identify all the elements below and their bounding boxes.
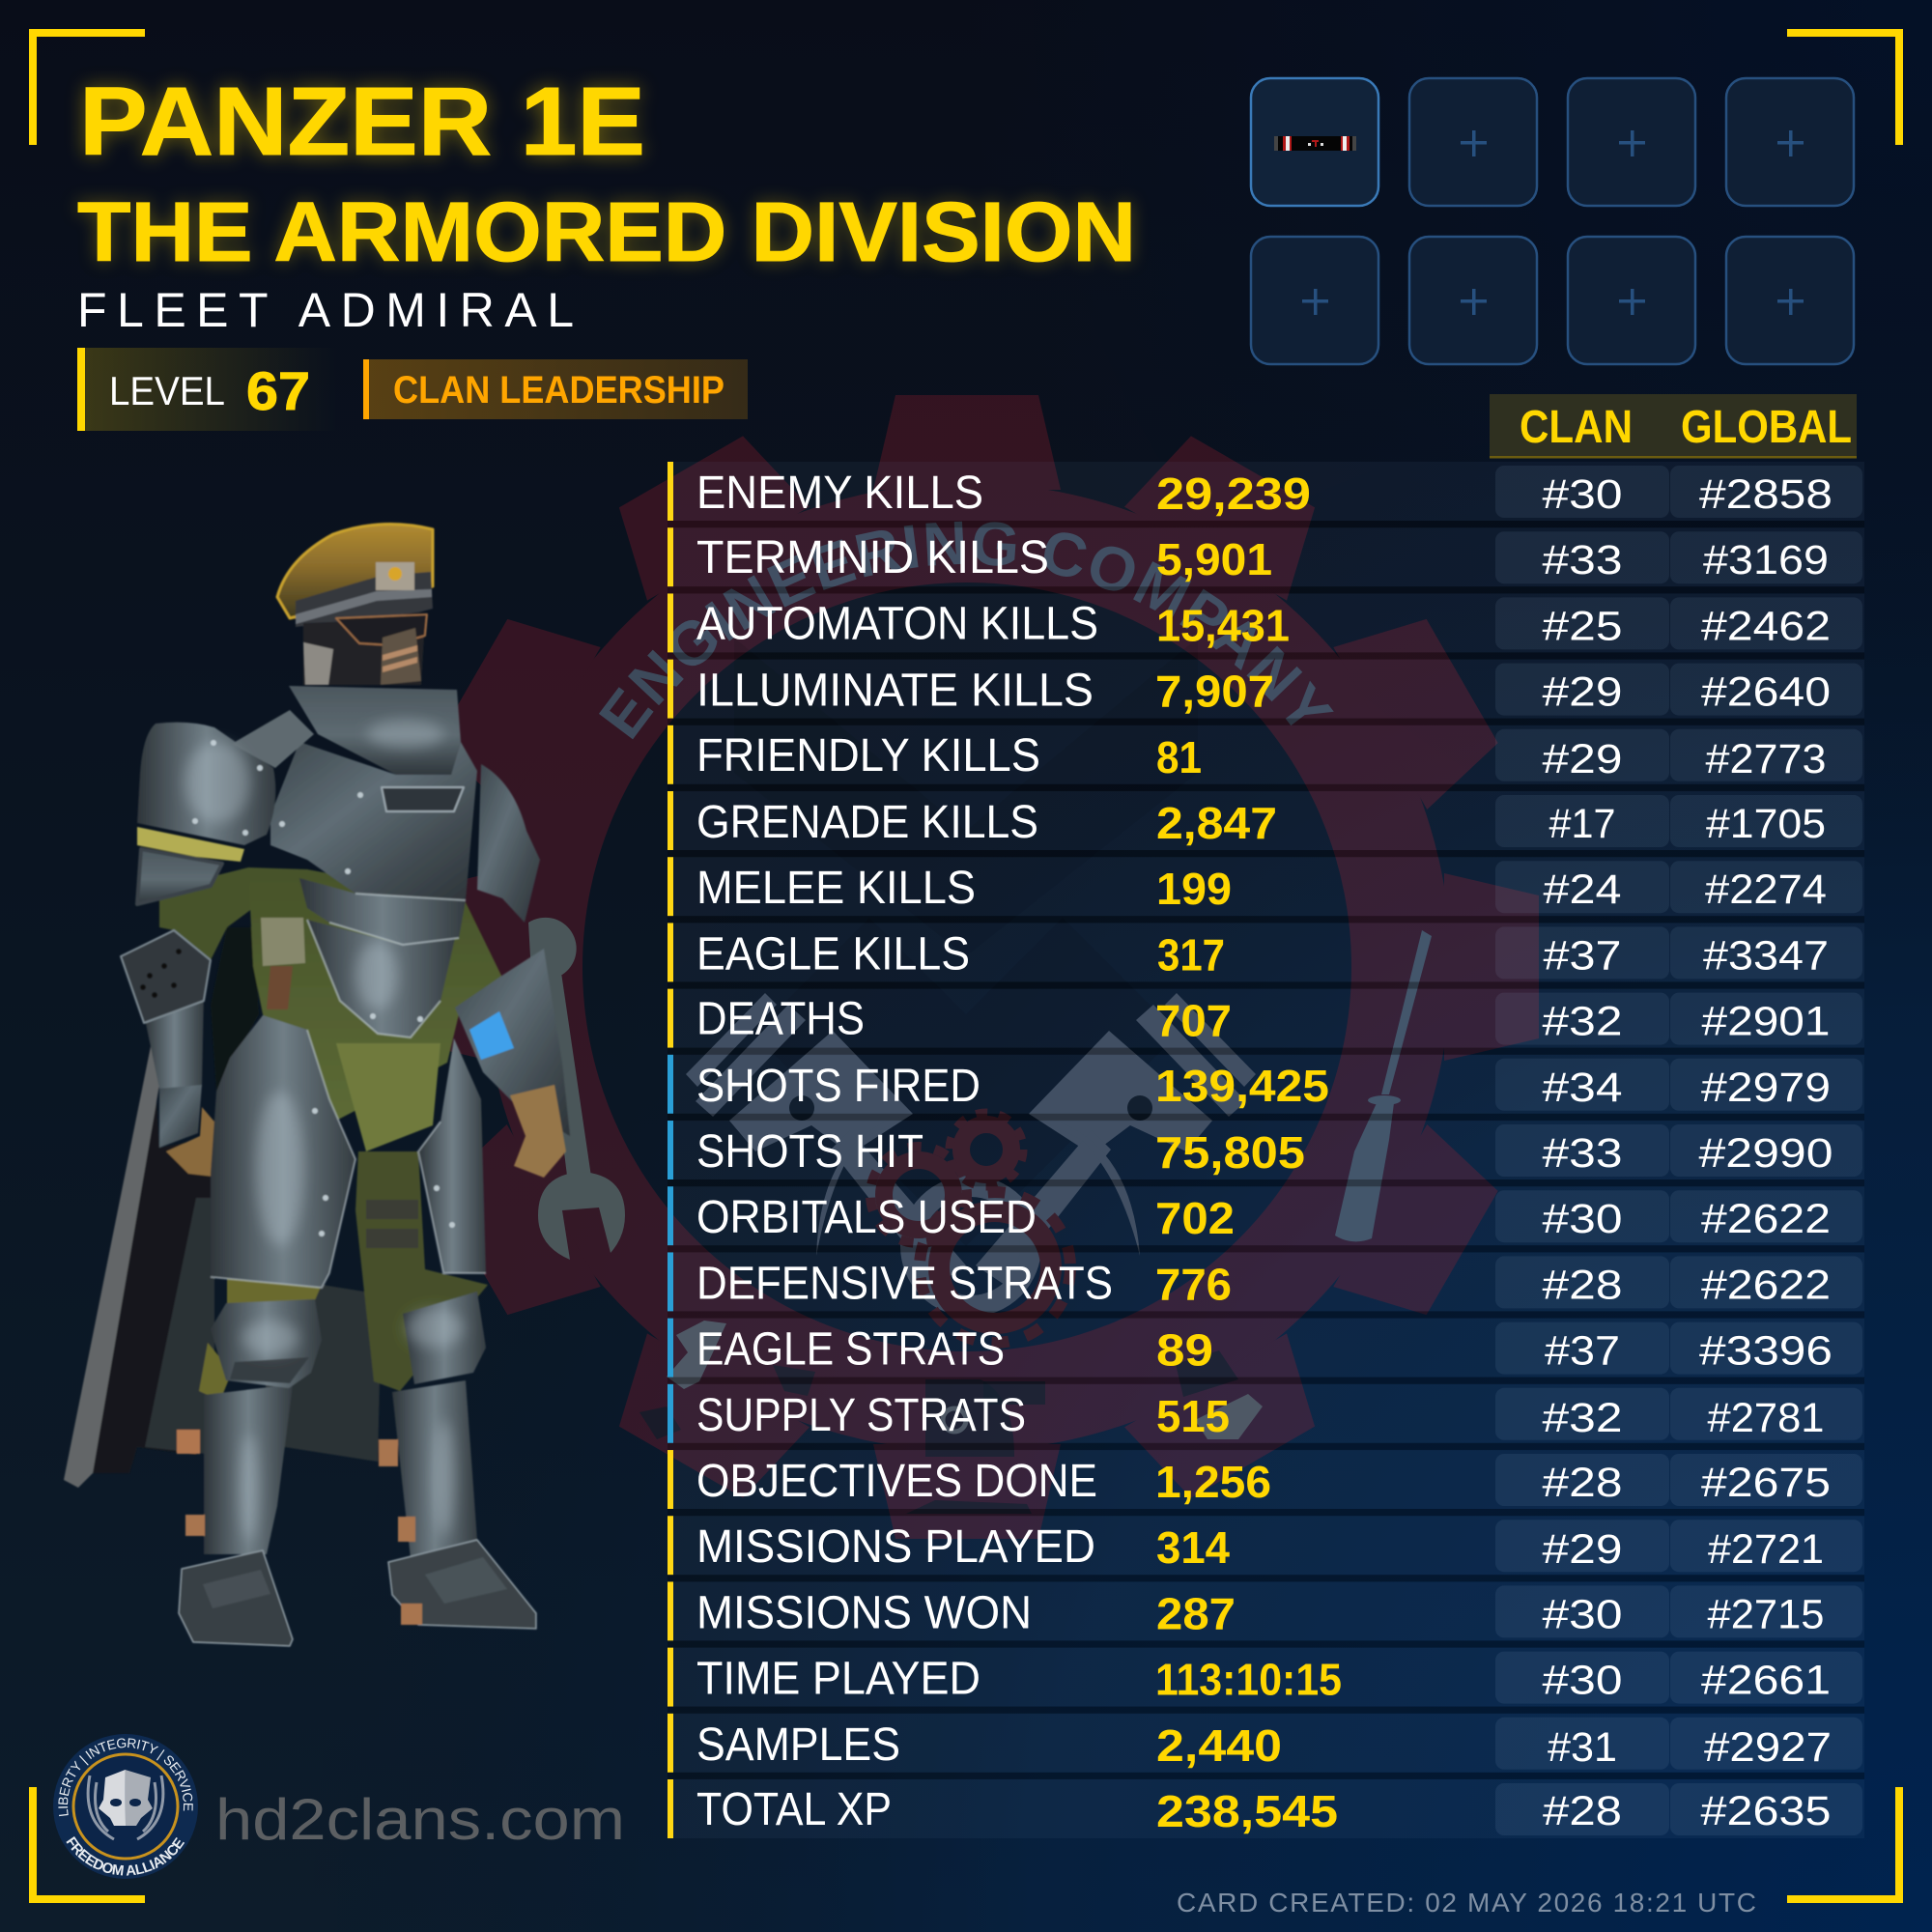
cape: [64, 1022, 382, 1488]
hat: [277, 525, 433, 627]
row: time played: #2661: [1701, 1658, 1831, 1704]
gear ring: [395, 395, 1539, 1539]
row: enemy kills: [668, 462, 1864, 521]
row: missions played: #29: [1542, 1526, 1623, 1573]
row: deaths: 707: [1155, 996, 1232, 1046]
heading: clan name: THE ARMORED DIVISION: [77, 185, 1136, 279]
row: grenade kills: #17: [1549, 801, 1615, 847]
row: samples: SAMPLES: [696, 1719, 900, 1771]
icon: crossed pistons: [686, 993, 1256, 1306]
emblem: freedom alliance: [53, 1734, 198, 1879]
row: time played: #30: [1542, 1658, 1623, 1704]
row: orbitals used: ORBITALS USED: [696, 1192, 1037, 1243]
row: objectives done: OBJECTIVES DONE: [696, 1456, 1097, 1507]
emblem wreath: [88, 1776, 163, 1839]
panel: soldier figure: [64, 525, 570, 1646]
row: objectives done: 1,256: [1155, 1457, 1271, 1507]
row: total xp: #2635: [1700, 1788, 1832, 1834]
row: supply strats: SUPPLY STRATS: [696, 1390, 1026, 1441]
title: player name: PANZER 1E: [79, 68, 645, 176]
icon: screwdriver: [1335, 930, 1432, 1241]
right pauldron: [477, 764, 540, 923]
row: orbitals used: #30: [1542, 1196, 1623, 1242]
column heading: clan: CLAN: [1520, 402, 1633, 453]
row: automaton kills: 15,431: [1156, 600, 1290, 650]
table header: clan and global: [1490, 394, 1857, 458]
row: shots hit: [668, 1121, 1864, 1179]
emblem skull: [99, 1770, 153, 1826]
row: eagle kills: EAGLE KILLS: [696, 928, 970, 980]
row: enemy kills: ENEMY KILLS: [696, 468, 983, 519]
row: samples: [668, 1714, 1864, 1773]
left pauldron: [137, 710, 314, 904]
slot with ribbon: [1251, 78, 1378, 206]
row: objectives done: #2675: [1701, 1460, 1831, 1506]
row: shots fired: [668, 1055, 1864, 1114]
row: grenade kills: #1705: [1706, 801, 1826, 847]
row: eagle kills: 317: [1157, 929, 1225, 980]
row: automaton kills: AUTOMATON KILLS: [696, 598, 1098, 649]
row: illuminate kills: #2640: [1701, 669, 1831, 716]
row: shots fired: SHOTS FIRED: [696, 1061, 980, 1112]
row: grenade kills: GRENADE KILLS: [696, 797, 1038, 848]
row: shots hit: #2990: [1698, 1130, 1833, 1177]
row: eagle kills: [668, 923, 1864, 981]
level value: 67: [246, 360, 310, 421]
row: friendly kills: [668, 725, 1864, 784]
row: shots fired: #34: [1542, 1065, 1623, 1111]
row: friendly kills: #2773: [1706, 736, 1826, 782]
row: eagle kills: #37: [1544, 932, 1621, 979]
left arm: [121, 930, 230, 1178]
row: missions won: 287: [1156, 1588, 1236, 1638]
row: enemy kills: 29,239: [1156, 469, 1311, 519]
row: friendly kills: #29: [1542, 736, 1623, 782]
row: terminid kills: #3169: [1703, 537, 1829, 583]
row: missions played: #2721: [1708, 1526, 1824, 1573]
row: automaton kills: [668, 593, 1864, 652]
icon: ring emblems: [639, 1321, 1263, 1514]
metal highlights: [185, 720, 464, 1541]
row: orbitals used: 702: [1155, 1193, 1235, 1243]
row: defensive strats: #2622: [1701, 1262, 1831, 1308]
empty slots: [1251, 78, 1854, 364]
right arm with blue light: [455, 949, 570, 1178]
row: eagle strats: 89: [1156, 1325, 1213, 1376]
row: shots hit: SHOTS HIT: [696, 1126, 923, 1178]
row: time played: 113:10:15: [1155, 1655, 1342, 1705]
icon: small gears: [870, 1113, 1070, 1343]
row: orbitals used: [668, 1186, 1864, 1245]
row: illuminate kills: #29: [1542, 669, 1623, 716]
right leg armor: [379, 1292, 536, 1629]
row: melee kills: MELEE KILLS: [696, 863, 976, 914]
row: total xp: [668, 1779, 1864, 1838]
helmet mask: [303, 614, 427, 685]
row: illuminate kills: 7,907: [1155, 667, 1274, 717]
row: supply strats: [668, 1384, 1864, 1443]
row: time played: TIME PLAYED: [696, 1654, 980, 1705]
row: defensive strats: 776: [1155, 1259, 1232, 1309]
row: total xp: #28: [1543, 1788, 1622, 1834]
chest armor: [270, 686, 477, 1037]
row: automaton kills: #2462: [1701, 603, 1831, 649]
green uniform: [159, 867, 504, 1401]
badge text: CLAN LEADERSHIP: [393, 369, 724, 412]
row: total xp: TOTAL XP: [696, 1784, 892, 1835]
row: shots fired: #2979: [1701, 1065, 1831, 1111]
arc text: engineering company: ENGINEERING COMPANY: [599, 522, 1334, 740]
icon: wrench: [528, 918, 625, 1260]
row: missions won: MISSIONS WON: [696, 1587, 1032, 1638]
row: enemy kills: #30: [1542, 471, 1623, 518]
panel: stats table: [668, 462, 1864, 1838]
row: supply strats: #2781: [1708, 1395, 1824, 1441]
row: missions played: 314: [1156, 1522, 1230, 1573]
clan leadership badge: [363, 359, 748, 419]
row: eagle strats: EAGLE STRATS: [696, 1324, 1005, 1376]
row: defensive strats: [668, 1252, 1864, 1311]
row: missions won: [668, 1581, 1864, 1640]
footer: card created timestamp: CARD CREATED: 02 MAY 2026 18:21 UTC: [1177, 1888, 1756, 1918]
row: objectives done: [668, 1450, 1864, 1509]
row: melee kills: #24: [1544, 867, 1621, 913]
column heading: global: GLOBAL: [1681, 402, 1852, 453]
row: friendly kills: 81: [1156, 732, 1202, 782]
row: deaths: [668, 989, 1864, 1048]
row: melee kills: #2274: [1705, 867, 1827, 913]
row: defensive strats: DEFENSIVE STRATS: [696, 1258, 1113, 1309]
panel: medal slots: [1251, 78, 1854, 364]
row: missions played: MISSIONS PLAYED: [696, 1521, 1095, 1573]
row: samples: 2,440: [1156, 1720, 1282, 1771]
row: melee kills: 199: [1156, 864, 1232, 914]
row: supply strats: 515: [1156, 1391, 1230, 1441]
row: automaton kills: #25: [1542, 603, 1623, 649]
row: eagle kills: #3347: [1703, 932, 1829, 979]
emblem motto: LIBERTY | INTEGRITY | SERVICE: [58, 1738, 193, 1816]
row: deaths: #32: [1542, 999, 1623, 1045]
watermark: engineering company gear logo: [450, 395, 1539, 1539]
row: eagle strats: #3396: [1699, 1328, 1833, 1375]
text: rank: FLEET ADMIRAL: [77, 283, 574, 337]
row: samples: #2927: [1704, 1724, 1832, 1771]
inner dark chevrons: [734, 638, 1198, 1246]
row: terminid kills: TERMINID KILLS: [696, 532, 1049, 583]
row: illuminate kills: ILLUMINATE KILLS: [696, 666, 1094, 717]
row: enemy kills: #2858: [1699, 471, 1833, 518]
row: terminid kills: 5,901: [1156, 534, 1272, 584]
row: objectives done: #28: [1542, 1460, 1623, 1506]
left leg armor: [177, 1299, 322, 1646]
row: deaths: #2901: [1702, 999, 1830, 1045]
row: eagle strats: [668, 1319, 1864, 1378]
row: shots hit: #33: [1542, 1130, 1623, 1177]
row: orbitals used: #2622: [1701, 1196, 1831, 1242]
row: missions played: [668, 1516, 1864, 1575]
thigh armor: [211, 1015, 486, 1288]
row: supply strats: #32: [1542, 1395, 1623, 1441]
website text: hd2clans.com: [215, 1787, 625, 1852]
row: illuminate kills: [668, 660, 1864, 719]
row: shots fired: 139,425: [1155, 1061, 1329, 1111]
emblem name: FREEDOM ALLIANCE: [66, 1836, 185, 1876]
row: eagle strats: #37: [1545, 1328, 1620, 1375]
row: friendly kills: FRIENDLY KILLS: [696, 730, 1040, 781]
row: total xp: 238,545: [1156, 1786, 1338, 1836]
row: defensive strats: #28: [1542, 1262, 1623, 1308]
row: melee kills: [668, 857, 1864, 916]
level badge: [77, 348, 338, 431]
level label: LEVEL: [109, 368, 225, 413]
row: terminid kills: #33: [1542, 537, 1623, 583]
row: samples: #31: [1548, 1724, 1617, 1771]
row: time played: [668, 1648, 1864, 1707]
row: missions won: #2715: [1708, 1591, 1824, 1637]
row: deaths: DEATHS: [696, 994, 865, 1045]
row: grenade kills: 2,847: [1156, 798, 1277, 848]
row: terminid kills: [668, 527, 1864, 586]
row: missions won: #30: [1542, 1591, 1623, 1637]
row: grenade kills: [668, 791, 1864, 850]
row: shots hit: 75,805: [1155, 1127, 1305, 1178]
